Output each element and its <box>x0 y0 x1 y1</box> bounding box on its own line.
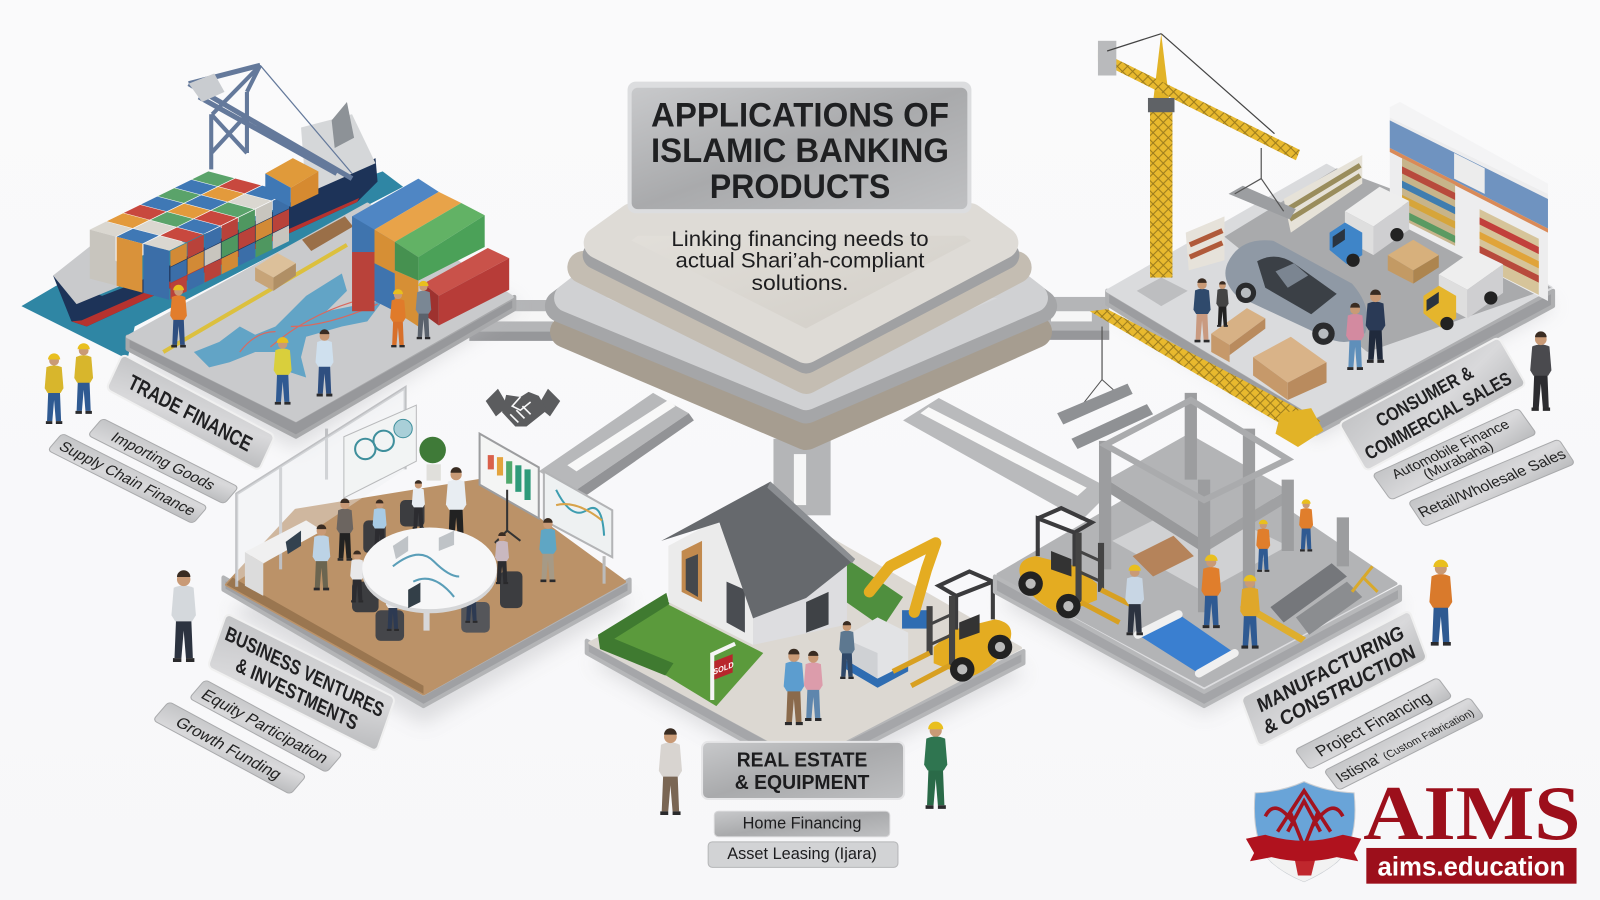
cartons <box>1388 240 1439 284</box>
quay line <box>163 245 347 352</box>
water <box>21 171 403 359</box>
subtitle: actual Shari’ah-compliant <box>676 249 925 272</box>
pill: home financing <box>714 811 890 837</box>
delivery truck: yellow <box>1423 250 1503 330</box>
plate: manufacturing <box>1241 610 1427 747</box>
plate: real estate: REAL ESTATE <box>737 749 867 771</box>
pill: istisna: Istisna’ (Custom Fabrication) <box>1333 704 1478 786</box>
plate: real estate <box>702 742 904 799</box>
icon: handshake <box>486 389 560 427</box>
surveyor figure <box>1429 560 1452 646</box>
world map <box>194 273 383 378</box>
title plate: PRODUCTS <box>710 168 890 206</box>
safety barrier <box>1352 566 1378 592</box>
couple <box>784 621 855 725</box>
website bar: aims.education <box>1378 852 1565 882</box>
pill: importing goods <box>88 418 239 504</box>
pill: automobile finance: Automobile Finance <box>1389 417 1513 482</box>
lifted steel beams <box>1057 384 1153 449</box>
sales desks <box>1211 308 1327 400</box>
connector: consumer sales to centre <box>1046 297 1109 340</box>
construction workers <box>1125 499 1313 649</box>
panel: real estate label <box>702 742 904 867</box>
panel: business ventures scene <box>223 388 633 724</box>
robot machine <box>843 543 936 688</box>
title plate: ISLAMIC BANKING <box>651 132 949 170</box>
plate: business ventures: & INVESTMENTS <box>233 654 360 735</box>
pill: growth funding <box>153 702 306 794</box>
panel: consumer sales scene <box>1057 34 1556 449</box>
forklift <box>893 571 1012 686</box>
subtitle: solutions. <box>752 272 848 295</box>
concrete frame <box>1105 393 1343 612</box>
panel: real estate scene <box>587 482 1026 786</box>
plate: real estate: & EQUIPMENT <box>735 772 870 794</box>
pill: project financing: Project Financing <box>1312 689 1435 760</box>
forklift <box>1018 508 1138 622</box>
plant <box>419 437 446 481</box>
panel: business ventures label <box>153 613 395 794</box>
panel: consumer sales label <box>1339 337 1575 527</box>
office team standing <box>313 467 557 590</box>
chairs and seated people <box>350 480 522 641</box>
workers beside trade finance <box>45 343 93 424</box>
pill: retail wholesale: Retail/Wholesale Sales <box>1415 446 1570 521</box>
mobile crane boom <box>1080 309 1323 447</box>
whiteboard: process diagram <box>344 405 416 498</box>
plate: manufacturing: & CONSTRUCTION <box>1261 641 1418 740</box>
panel: manufacturing label <box>1241 610 1484 790</box>
manager figure <box>1530 331 1551 411</box>
meeting table <box>362 528 497 631</box>
plate: trade finance: TRADE FINANCE <box>124 370 256 457</box>
ship container stacks <box>90 171 288 251</box>
plate: business ventures: BUSINESS VENTURES <box>222 623 386 722</box>
blueprint <box>1138 614 1235 673</box>
pill: importing goods: Importing Goods <box>107 430 219 494</box>
panel: trade finance scene <box>21 65 520 449</box>
connector: business ventures to centre <box>539 393 694 500</box>
pill: asset leasing: Asset Leasing (Ijara) <box>727 845 877 863</box>
showroom people <box>1193 278 1385 370</box>
platform <box>128 204 514 437</box>
pill: automobile finance: (Murabaha) <box>1420 439 1497 482</box>
car <box>1225 240 1368 345</box>
pill: project financing <box>1295 677 1452 769</box>
central pedestal <box>561 219 1041 434</box>
glass wall <box>237 388 405 587</box>
house <box>661 482 855 645</box>
hedge <box>598 593 673 676</box>
panel: trade finance label <box>48 354 275 524</box>
plate: manufacturing: MANUFACTURING <box>1254 622 1407 718</box>
title plate <box>628 82 971 213</box>
plate: consumer <box>1339 337 1526 471</box>
pill: automobile finance <box>1372 408 1537 500</box>
icon: shield emblem <box>1246 782 1361 882</box>
pill: equity participation: Equity Participation <box>197 687 332 767</box>
agent figure <box>659 728 682 815</box>
connector: trade finance to centre <box>469 300 553 341</box>
engineer figure <box>924 722 947 809</box>
chart board <box>480 434 539 543</box>
hanging beam <box>1229 186 1296 219</box>
panel: manufacturing scene <box>995 393 1403 714</box>
stacked containers <box>352 179 509 327</box>
plate: consumer: COMMERCIAL SALES <box>1361 369 1516 465</box>
title plate: APPLICATIONS OF <box>651 97 949 135</box>
sold sign <box>710 642 736 700</box>
plate: consumer: CONSUMER & <box>1373 363 1478 432</box>
subtitle: Linking financing needs to <box>671 228 929 251</box>
sold sign: SOLD <box>713 660 734 677</box>
desk <box>245 520 322 596</box>
delivery truck: blue <box>1330 187 1409 267</box>
ship <box>53 65 378 327</box>
plate: business ventures <box>208 613 395 752</box>
lawn <box>604 602 763 706</box>
subtitle <box>671 228 929 295</box>
connector: manufacturing to centre <box>903 398 1112 520</box>
tower crane <box>1098 34 1300 306</box>
logo: AIMS <box>1246 770 1581 884</box>
wordmark: AIMS <box>1363 770 1581 856</box>
steel beams <box>1240 563 1362 643</box>
ship crane <box>189 65 352 179</box>
connector: real estate to centre <box>773 439 831 515</box>
workers on quay <box>170 281 431 405</box>
storefront <box>1390 102 1548 301</box>
pill: home financing: Home Financing <box>743 815 861 833</box>
pill: supply chain finance: Supply Chain Finance <box>55 439 199 519</box>
pill: asset leasing <box>708 842 898 867</box>
shelf unit <box>1186 155 1362 270</box>
pill: growth funding: Growth Funding <box>171 714 285 783</box>
businessman figure <box>171 570 196 662</box>
strategy board <box>544 471 612 584</box>
cargo boxes <box>255 216 353 291</box>
